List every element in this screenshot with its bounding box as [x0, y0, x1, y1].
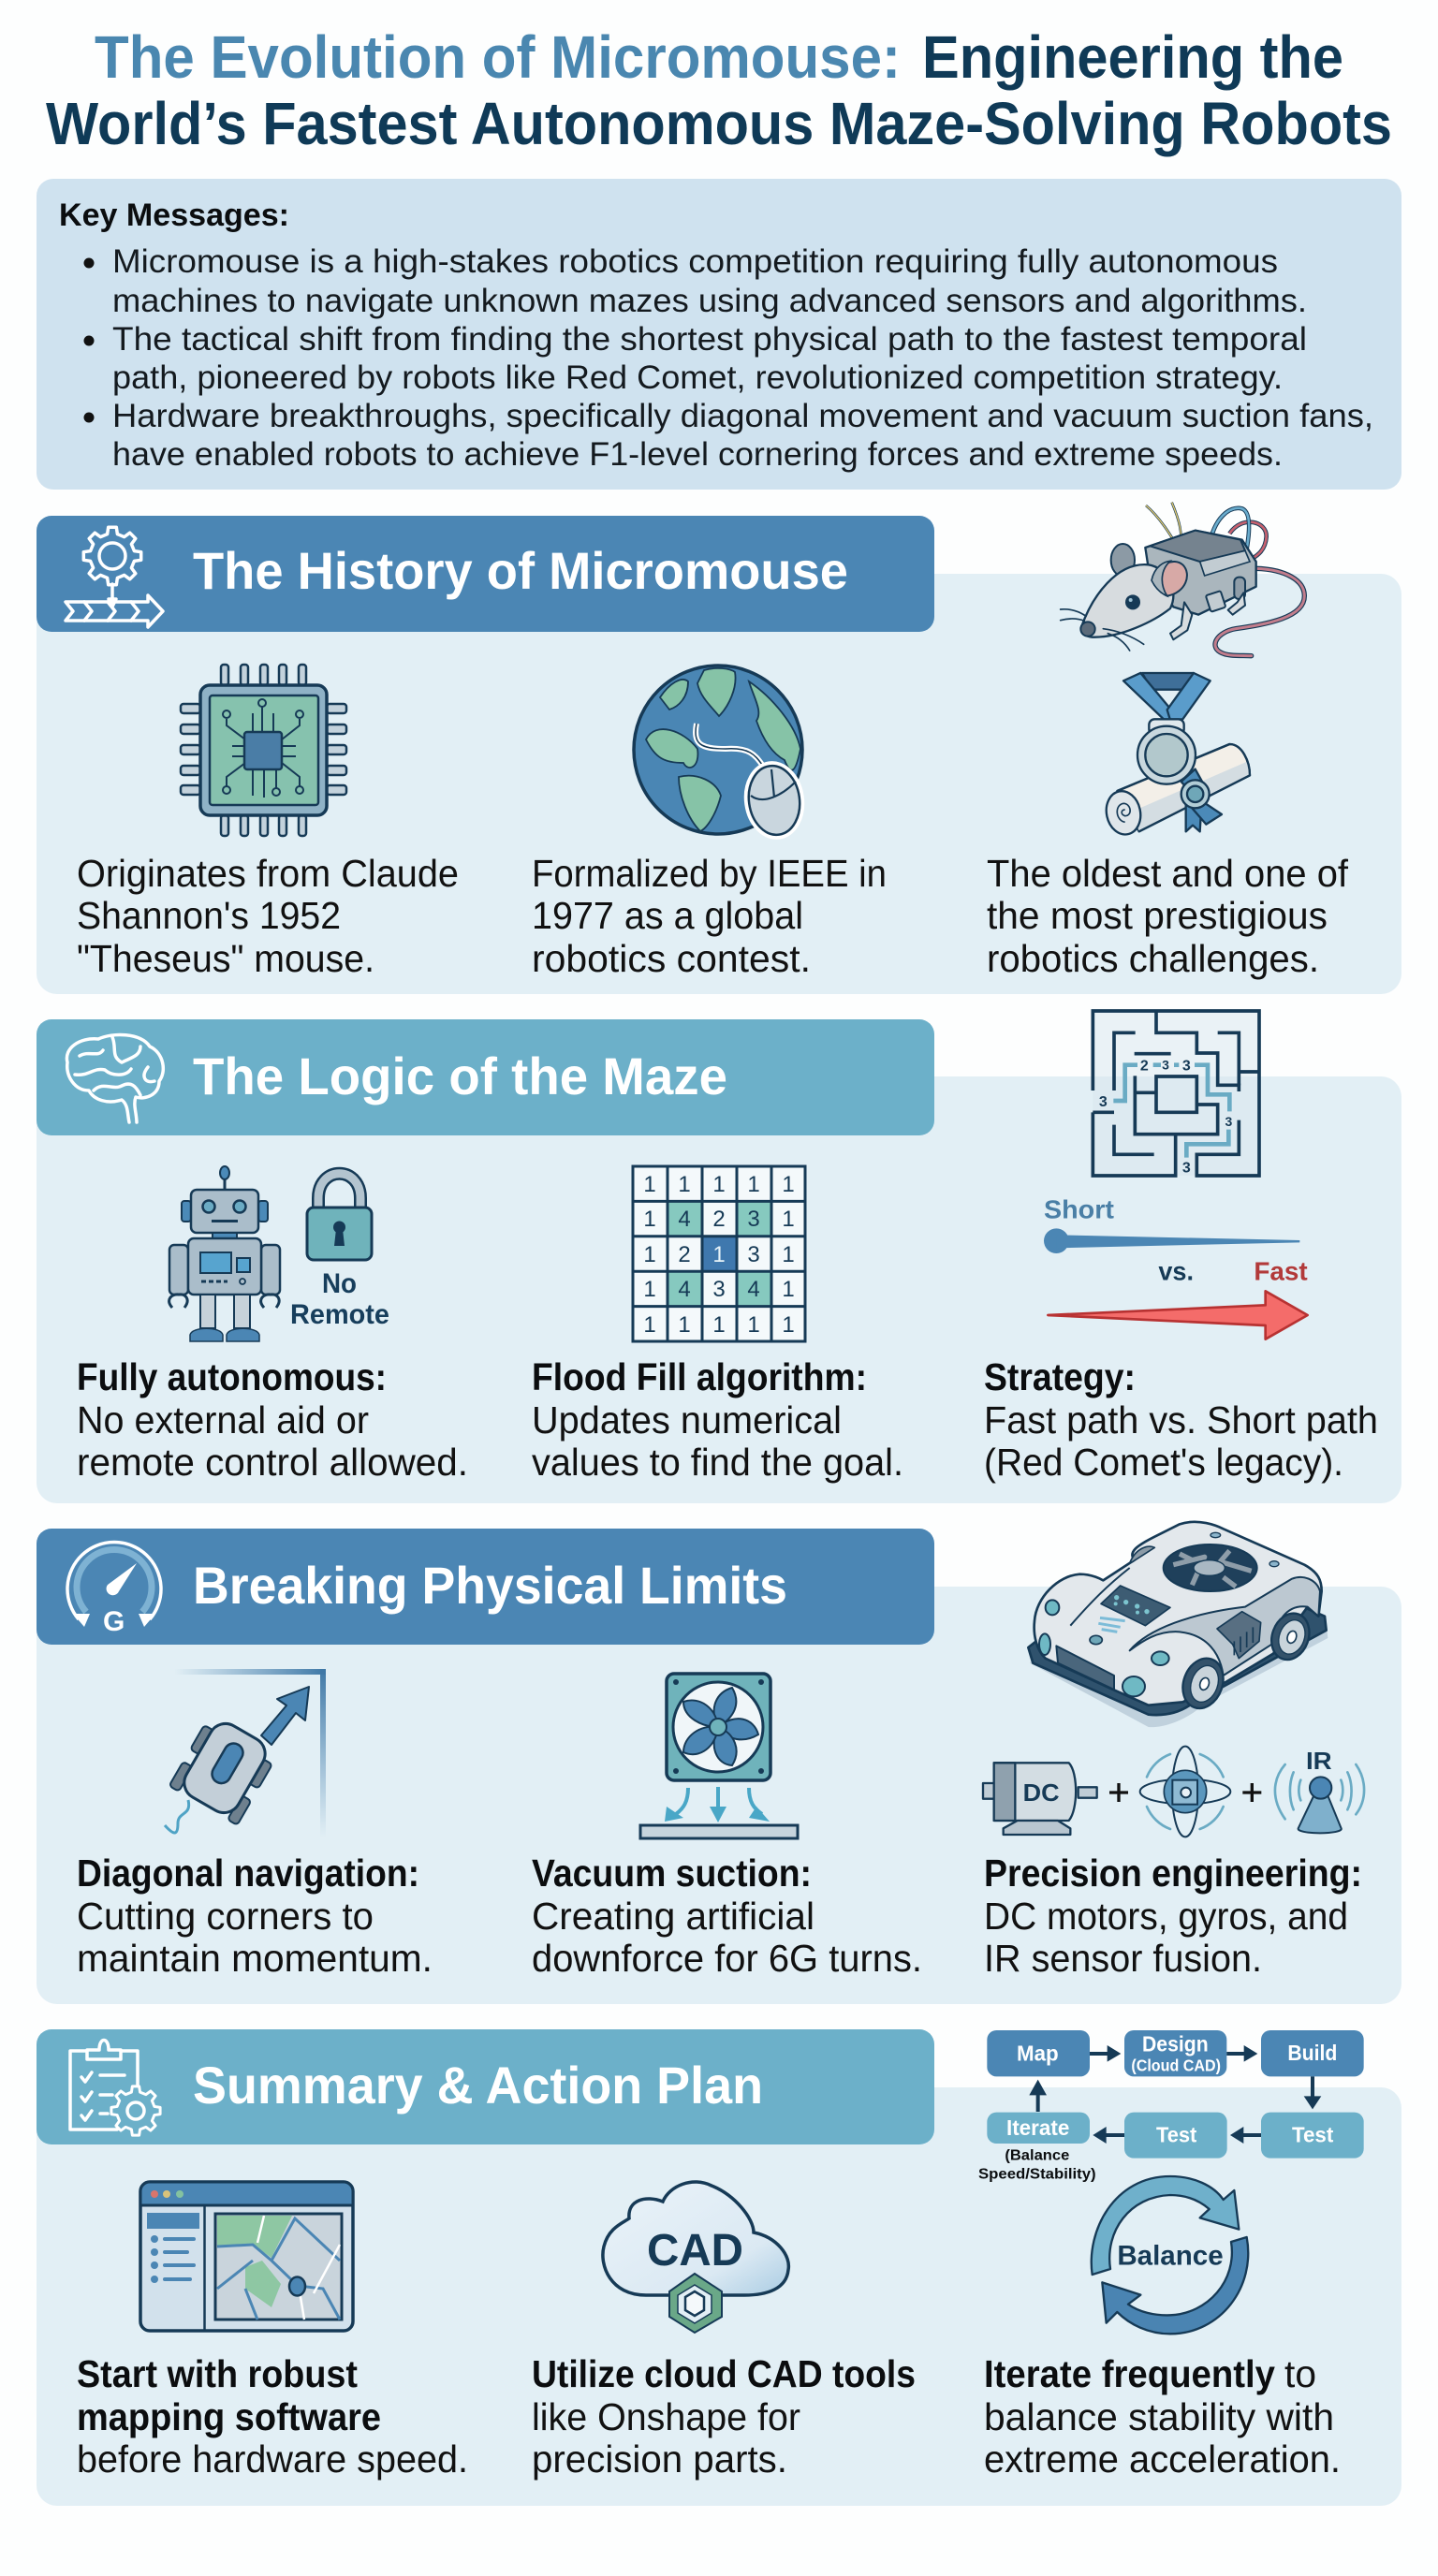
- icon: flood fill grid: [633, 1166, 805, 1341]
- icon: flood fill grid: 1: [678, 1172, 691, 1197]
- icon: G gauge: G: [103, 1606, 125, 1637]
- panel: key messages: [37, 179, 1401, 490]
- text: cloud CAD tools: [532, 2352, 916, 2481]
- text: vacuum suction: [532, 1852, 922, 1980]
- text: mapping software: mapping software: [77, 2395, 381, 2438]
- panel: key messages: have enabled robots to achieve F1-level cornering forces and extreme speeds.: [112, 436, 1283, 473]
- heading banner: summary: [37, 2029, 934, 2144]
- text: flood fill: Flood Fill algorithm:: [532, 1355, 867, 1398]
- chart: short versus fast paths: Fast: [1254, 1256, 1308, 1285]
- icon: flood fill grid: 1: [712, 1312, 726, 1338]
- text: prestige: The oldest and one of: [987, 852, 1349, 895]
- icon: globe with mouse: [634, 666, 806, 841]
- heading banner: history: The History of Micromouse: [193, 541, 848, 600]
- icon: maze: 2: [1140, 1058, 1149, 1074]
- icon: motor, gyro and IR sensor: DC: [1023, 1778, 1060, 1807]
- heading banner: limits: Breaking Physical Limits: [193, 1556, 787, 1615]
- icon: brain: [66, 1034, 163, 1122]
- text: strategy: Strategy:: [984, 1355, 1136, 1398]
- icon: robotic car: [1028, 1522, 1328, 1727]
- text: mapping software: [77, 2352, 468, 2481]
- icon: flood fill grid: 1: [782, 1207, 795, 1232]
- icon: maze: 3: [1225, 1114, 1232, 1129]
- text: prestige: robotics challenges.: [987, 937, 1319, 980]
- text: strategy: Fast path vs. Short path: [984, 1398, 1378, 1442]
- icon: gear and conveyor: [66, 527, 163, 627]
- text: IEEE: Formalized by IEEE in: [532, 852, 887, 895]
- text: fully autonomous: No external aid or: [77, 1398, 369, 1442]
- text: iterate frequently: Iterate frequently: [984, 2352, 1275, 2395]
- label: no remote: Remote: [290, 1299, 389, 1330]
- flowchart: development loop: Test: [1292, 2122, 1334, 2146]
- icon: flood fill grid: 3: [747, 1207, 760, 1232]
- panel: the history of micromouse: [37, 503, 1401, 994]
- text: diagonal navigation: maintain momentum.: [77, 1937, 433, 1980]
- icon: flood fill grid: 2: [712, 1207, 726, 1232]
- icon: flood fill grid: 1: [782, 1172, 795, 1197]
- heading banner: summary: Summary & Action Plan: [193, 2056, 763, 2115]
- icon: diagonal navigation: [165, 1669, 326, 1837]
- text: precision engineering: [984, 1852, 1362, 1980]
- text: vacuum suction: Vacuum suction:: [532, 1852, 812, 1895]
- icon: robot mouse: [1061, 503, 1304, 656]
- text: vacuum suction: Creating artificial: [532, 1895, 814, 1938]
- icon: robot and lock: [169, 1166, 389, 1341]
- text: Shannon origin: Shannon's 1952: [77, 894, 341, 937]
- chart: short versus fast paths: [1044, 1195, 1308, 1339]
- text: diagonal navigation: Diagonal navigation:: [77, 1852, 419, 1895]
- icon: flood fill grid: 1: [712, 1242, 726, 1267]
- icon: flood fill grid: 1: [643, 1207, 656, 1232]
- lock: [307, 1174, 372, 1260]
- flowchart: development loop: (Balance: [1005, 2147, 1069, 2163]
- icon: flood fill grid: 1: [712, 1172, 726, 1197]
- label: no remote: No: [322, 1268, 357, 1299]
- flowchart: development loop: Map: [1017, 2042, 1059, 2066]
- icon: flood fill grid: 1: [643, 1277, 656, 1302]
- flowchart: development loop: Test: [1156, 2122, 1197, 2146]
- text: Shannon origin: [77, 852, 459, 980]
- icon: flood fill grid: 1: [747, 1172, 760, 1197]
- text: flood fill: [532, 1355, 903, 1484]
- icon: motor, gyro and IR sensor: [983, 1747, 1364, 1837]
- icon: flood fill grid: 4: [678, 1207, 691, 1232]
- flowchart: development loop: (Cloud CAD): [1131, 2056, 1221, 2075]
- icon: flood fill grid: 1: [782, 1277, 795, 1302]
- text: fully autonomous: [77, 1355, 468, 1484]
- icon: flood fill grid: 1: [782, 1242, 795, 1267]
- text: cloud CAD tools: Utilize cloud CAD tools: [532, 2352, 916, 2395]
- text: mapping software: before hardware speed.: [77, 2437, 468, 2481]
- text: flood fill: Updates numerical: [532, 1398, 842, 1442]
- text: IEEE: 1977 as a global: [532, 894, 803, 937]
- flowchart: development loop: Iterate: [1006, 2115, 1069, 2140]
- icon: medal and scroll: [1103, 673, 1250, 838]
- icon: flood fill grid: 1: [643, 1312, 656, 1338]
- icon: mapping software window: [140, 2182, 353, 2331]
- icon: balance cycle: Balance: [1117, 2240, 1224, 2271]
- text: mapping software: Start with robust: [77, 2352, 358, 2395]
- text: diagonal navigation: Cutting corners to: [77, 1895, 374, 1938]
- label: no remote: [290, 1268, 389, 1330]
- text: diagonal navigation: [77, 1852, 433, 1980]
- title: Engineering the: [922, 23, 1343, 91]
- icon: maze: 3: [1099, 1094, 1108, 1110]
- icon: balance cycle: [1092, 2176, 1248, 2334]
- text: Shannon origin: "Theseus" mouse.: [77, 937, 374, 980]
- flowchart: development loop: [978, 2030, 1364, 2183]
- panel: key messages: path, pioneered by robots like Red Comet, revolutionized competition strategy.: [112, 359, 1283, 396]
- text: strategy: (Red Comet's legacy).: [984, 1441, 1343, 1484]
- icon: G gauge: [67, 1543, 161, 1637]
- text: iterate frequently: extreme acceleration.: [984, 2437, 1341, 2481]
- icon: maze: 3: [1162, 1058, 1169, 1073]
- icon: motor, gyro and IR sensor: IR: [1306, 1747, 1332, 1775]
- text: Shannon origin: Originates from Claude: [77, 852, 459, 895]
- heading banner: logic: The Logic of the Maze: [193, 1046, 727, 1105]
- flowchart: development loop: Speed/Stability): [978, 2167, 1096, 2183]
- icon: flood fill grid: 1: [747, 1312, 760, 1338]
- title: The Evolution of Micromouse:: [95, 23, 901, 91]
- robot: [169, 1166, 280, 1341]
- text: prestige: the most prestigious: [987, 894, 1328, 937]
- chart: short versus fast paths: vs.: [1158, 1256, 1194, 1285]
- text: IEEE: [532, 852, 887, 980]
- text: flood fill: values to find the goal.: [532, 1441, 903, 1484]
- icon: flood fill grid: 3: [747, 1242, 760, 1267]
- chart: short versus fast paths: Short: [1044, 1195, 1114, 1224]
- icon: flood fill grid: 4: [678, 1277, 691, 1302]
- text: fully autonomous: remote control allowed.: [77, 1441, 468, 1484]
- heading banner: history: [37, 516, 934, 632]
- icon: vacuum fan: [640, 1674, 798, 1838]
- panel: breaking physical limits: [37, 1522, 1401, 2004]
- text: cloud CAD tools: like Onshape for: [532, 2395, 800, 2438]
- icon: flood fill grid: 4: [747, 1277, 760, 1302]
- text: prestige: [987, 852, 1349, 980]
- panel: key messages: machines to navigate unknown mazes using advanced sensors and algorithms.: [112, 283, 1307, 319]
- flowchart: development loop: Design: [1142, 2032, 1209, 2056]
- text: vacuum suction: downforce for 6G turns.: [532, 1937, 922, 1980]
- icon: microchip: [181, 665, 346, 836]
- heading banner: limits: [37, 1529, 934, 1645]
- title: [46, 23, 1392, 157]
- icon: flood fill grid: 1: [678, 1312, 691, 1338]
- heading banner: logic: [37, 1019, 934, 1135]
- text: precision engineering: DC motors, gyros, and: [984, 1895, 1348, 1938]
- icon: maze: 3: [1182, 1058, 1191, 1074]
- icon: maze: 3: [1182, 1161, 1191, 1177]
- icon: flood fill grid: 1: [782, 1312, 795, 1338]
- text: iterate frequently: [984, 2352, 1341, 2481]
- text: cloud CAD tools: precision parts.: [532, 2437, 787, 2481]
- text: precision engineering: IR sensor fusion.: [984, 1937, 1262, 1980]
- text: strategy: [984, 1355, 1378, 1484]
- icon: flood fill grid: 1: [643, 1172, 656, 1197]
- icon: maze: [1093, 1011, 1259, 1177]
- icon: cloud CAD: [603, 2182, 788, 2333]
- panel: key messages: The tactical shift from finding the shortest physical path to the fastest temporal: [112, 321, 1307, 358]
- text: fully autonomous: Fully autonomous:: [77, 1355, 387, 1398]
- panel: key messages: Key Messages:: [59, 198, 289, 233]
- icon: clipboard with gear: [70, 2041, 160, 2135]
- panel: key messages: Hardware breakthroughs, specifically diagonal movement and vacuum suction fans,: [112, 398, 1373, 434]
- panel: key messages: Micromouse is a high-stakes robotics competition requiring fully autonomous: [112, 243, 1278, 280]
- flowchart: development loop: Build: [1287, 2041, 1337, 2065]
- text: iterate frequently: to: [1284, 2352, 1316, 2395]
- text: IEEE: robotics contest.: [532, 937, 811, 980]
- icon: cloud CAD: CAD: [647, 2226, 743, 2276]
- panel: the logic of the maze: [37, 1011, 1401, 1503]
- icon: flood fill grid: 1: [643, 1242, 656, 1267]
- text: precision engineering: Precision engineering:: [984, 1852, 1362, 1895]
- text: iterate frequently: balance stability with: [984, 2395, 1334, 2438]
- icon: flood fill grid: 3: [712, 1277, 726, 1302]
- panel: summary and action plan: [37, 2029, 1401, 2506]
- icon: flood fill grid: 2: [678, 1242, 691, 1267]
